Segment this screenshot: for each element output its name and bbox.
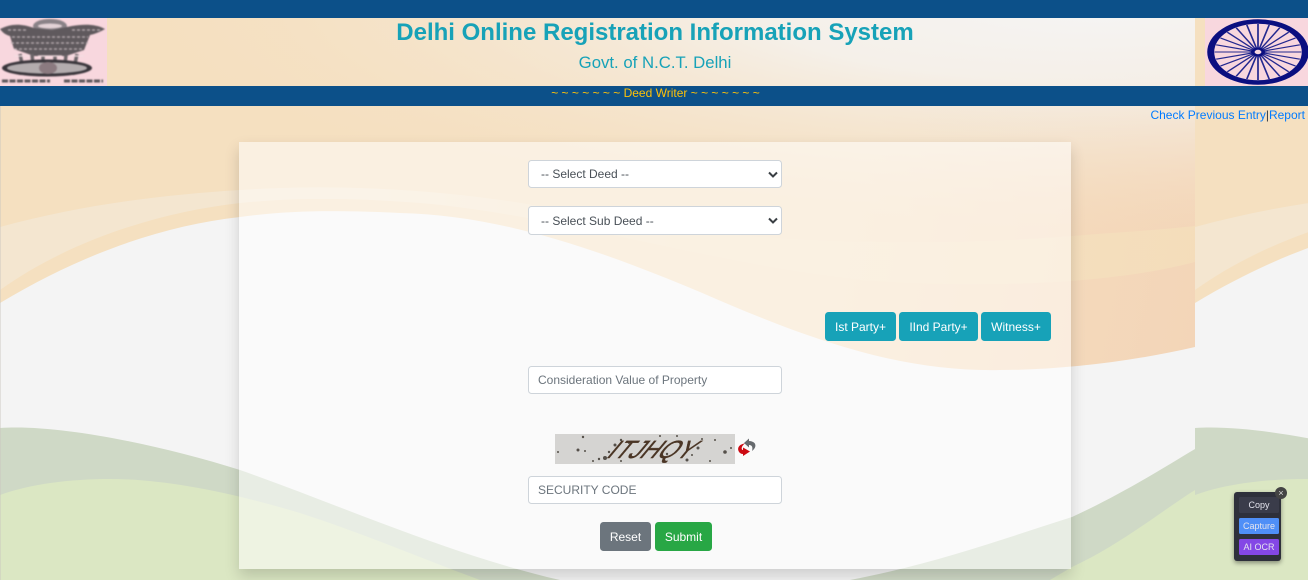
- header: Ashoka Chakra: [1205, 18, 1308, 86]
- title: Delhi Online Registration Information System: [396, 19, 914, 46]
- button: second party: [899, 312, 978, 341]
- widget button: AI OCR: AI OCR: [1243, 542, 1274, 552]
- floating OCR widget: [1234, 492, 1281, 561]
- button: first party: Ist Party+: [835, 320, 886, 334]
- widget button: copy: Copy: [1248, 500, 1270, 510]
- input: consideration value: [528, 366, 782, 394]
- widget button: AI OCR: [1239, 539, 1279, 555]
- select: deed: [528, 160, 782, 188]
- widget button: capture: Capture: [1243, 521, 1275, 531]
- button: reset: Reset: [610, 530, 641, 544]
- select: sub deed: [528, 206, 782, 235]
- input: consideration value: Consideration Value of Property: [538, 373, 707, 387]
- button: submit: [655, 522, 712, 551]
- input: security code: SECURITY CODE: [538, 483, 636, 497]
- icon: captcha refresh: [738, 438, 756, 456]
- button: witness: [981, 312, 1051, 341]
- select: sub deed: -- Select Sub Deed --: [541, 214, 654, 228]
- button: submit: Submit: [665, 530, 702, 544]
- widget close button: [1275, 487, 1287, 499]
- header top bar: [0, 0, 1308, 18]
- input: security code: [528, 476, 782, 504]
- header: national emblem: [0, 18, 107, 86]
- panel: form card: [239, 142, 1071, 569]
- subtitle: Govt. of N.C.T. Delhi: [579, 53, 731, 72]
- captcha image: ITJHQY: [600, 436, 707, 464]
- widget button: capture: [1239, 518, 1279, 534]
- header bottom bar with Deed Writer label: ~ ~ ~ ~ ~ ~ ~ Deed Writer ~ ~ ~ ~ ~ ~ ~: [551, 86, 760, 100]
- button: reset: [600, 522, 651, 551]
- button: first party: [825, 312, 896, 341]
- widget button: copy: [1239, 497, 1279, 513]
- widget close button: ×: [1278, 488, 1284, 498]
- captcha image: [555, 434, 735, 464]
- button: second party: IInd Party+: [909, 320, 968, 334]
- select: deed: -- Select Deed --: [541, 167, 629, 181]
- header bottom bar with Deed Writer label: [0, 86, 1308, 106]
- button: witness: Witness+: [991, 320, 1041, 334]
- top right links: Check Previous Entry|Report: [1150, 108, 1305, 122]
